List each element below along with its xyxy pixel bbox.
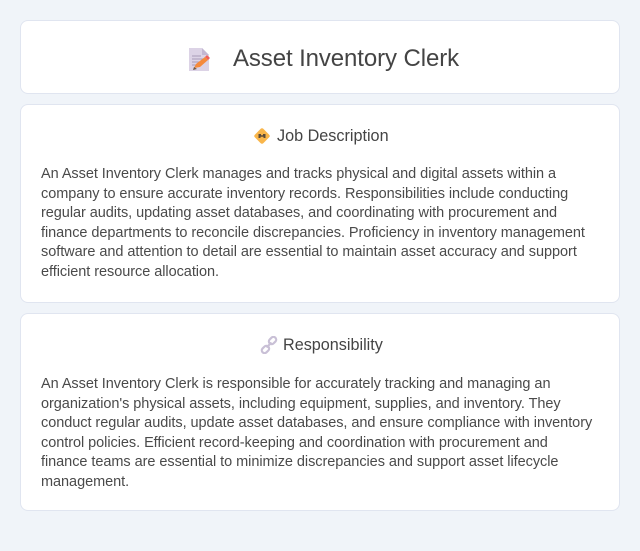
title: Asset Inventory Clerk xyxy=(233,45,459,72)
text block: responsibility: finance teams are essential to minimize discrepancies and support asset lifecycle xyxy=(41,454,558,470)
text block: responsibility: control policies. Efficient record-keeping and coordination with procurement and xyxy=(41,434,548,450)
text block: responsibility: An Asset Inventory Clerk is responsible for accurately tracking and managing an xyxy=(41,376,550,392)
text block: responsibility: management. xyxy=(41,474,129,490)
icon: document with pencil xyxy=(189,48,210,71)
heading: job description: Job Description xyxy=(277,127,389,145)
panel: responsibility xyxy=(20,313,620,511)
text block: job description: company to ensure accurate inventory records. Responsibilities include conducting xyxy=(41,186,568,202)
text block: job description: efficient resource allocation. xyxy=(41,264,219,280)
text block: job description: software and attention to detail are essential to maintain asset accuracy and support xyxy=(41,244,577,260)
text block: job description: finance departments to reconcile discrepancies. Proficiency in inventory management xyxy=(41,224,585,240)
icon: orange diamond sign xyxy=(254,128,270,144)
heading: responsibility: Responsibility xyxy=(283,336,383,354)
text block: responsibility: conduct regular audits, update asset databases, and ensure compliance with inventory xyxy=(41,415,592,431)
text block: responsibility: organization's physical assets, including equipment, supplies, and inventory. They xyxy=(41,396,561,412)
icon: chain link xyxy=(260,336,278,354)
panel: title card xyxy=(20,20,620,94)
text block: job description xyxy=(41,166,585,280)
panel: job description xyxy=(20,104,620,303)
text block: job description: regular audits, updating asset databases, and coordinating with procurement and xyxy=(41,205,557,221)
text block: responsibility xyxy=(41,376,592,490)
text block: job description: An Asset Inventory Clerk manages and tracks physical and digital assets within a xyxy=(41,166,556,182)
